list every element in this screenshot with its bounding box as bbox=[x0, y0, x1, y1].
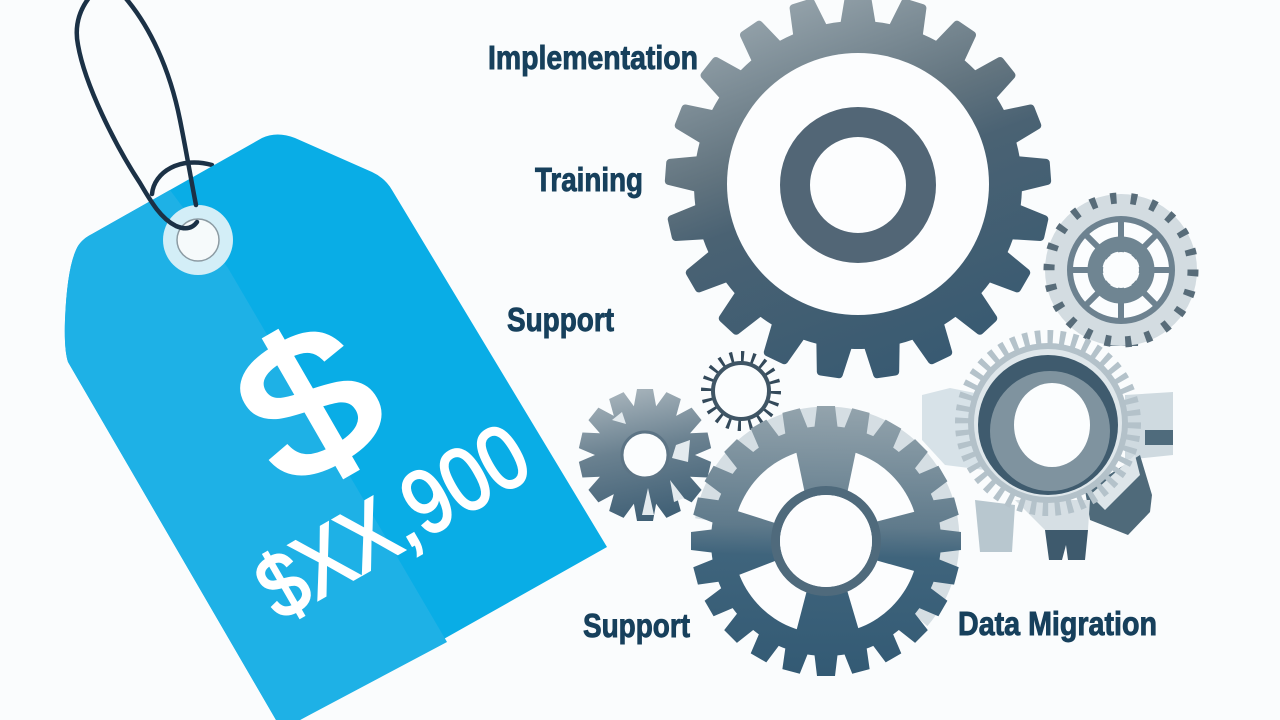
icon: large bottom gear bbox=[691, 406, 961, 676]
icon: price tag string loop bbox=[77, 0, 197, 228]
icon: tiny spiked gear bbox=[707, 357, 775, 425]
tag fold highlight bbox=[65, 190, 447, 720]
tag body bbox=[65, 134, 607, 720]
icon: large top gear bbox=[664, 0, 1052, 378]
icon: left small gear bbox=[578, 389, 712, 521]
heading: Support label upper: Support bbox=[507, 301, 614, 338]
left and right light blocks bbox=[922, 388, 985, 470]
icon: right layered gear bbox=[922, 337, 1173, 560]
fine teeth ring bbox=[962, 337, 1134, 509]
panel: blue price tag bbox=[65, 134, 607, 720]
tag eyelet bbox=[163, 205, 233, 275]
icon: small right gear bbox=[1045, 194, 1197, 346]
icon: price tag string back bbox=[152, 162, 212, 194]
heading: Data Migration label: Data Migration bbox=[958, 605, 1157, 642]
heading: Training label: Training bbox=[535, 161, 643, 198]
heading: Support label lower: Support bbox=[583, 607, 690, 644]
dollar sign: $ bbox=[200, 277, 417, 529]
heading: Implementation label: Implementation bbox=[488, 39, 698, 76]
spokes bbox=[731, 446, 925, 636]
tag price: $XX,900 bbox=[240, 405, 546, 639]
